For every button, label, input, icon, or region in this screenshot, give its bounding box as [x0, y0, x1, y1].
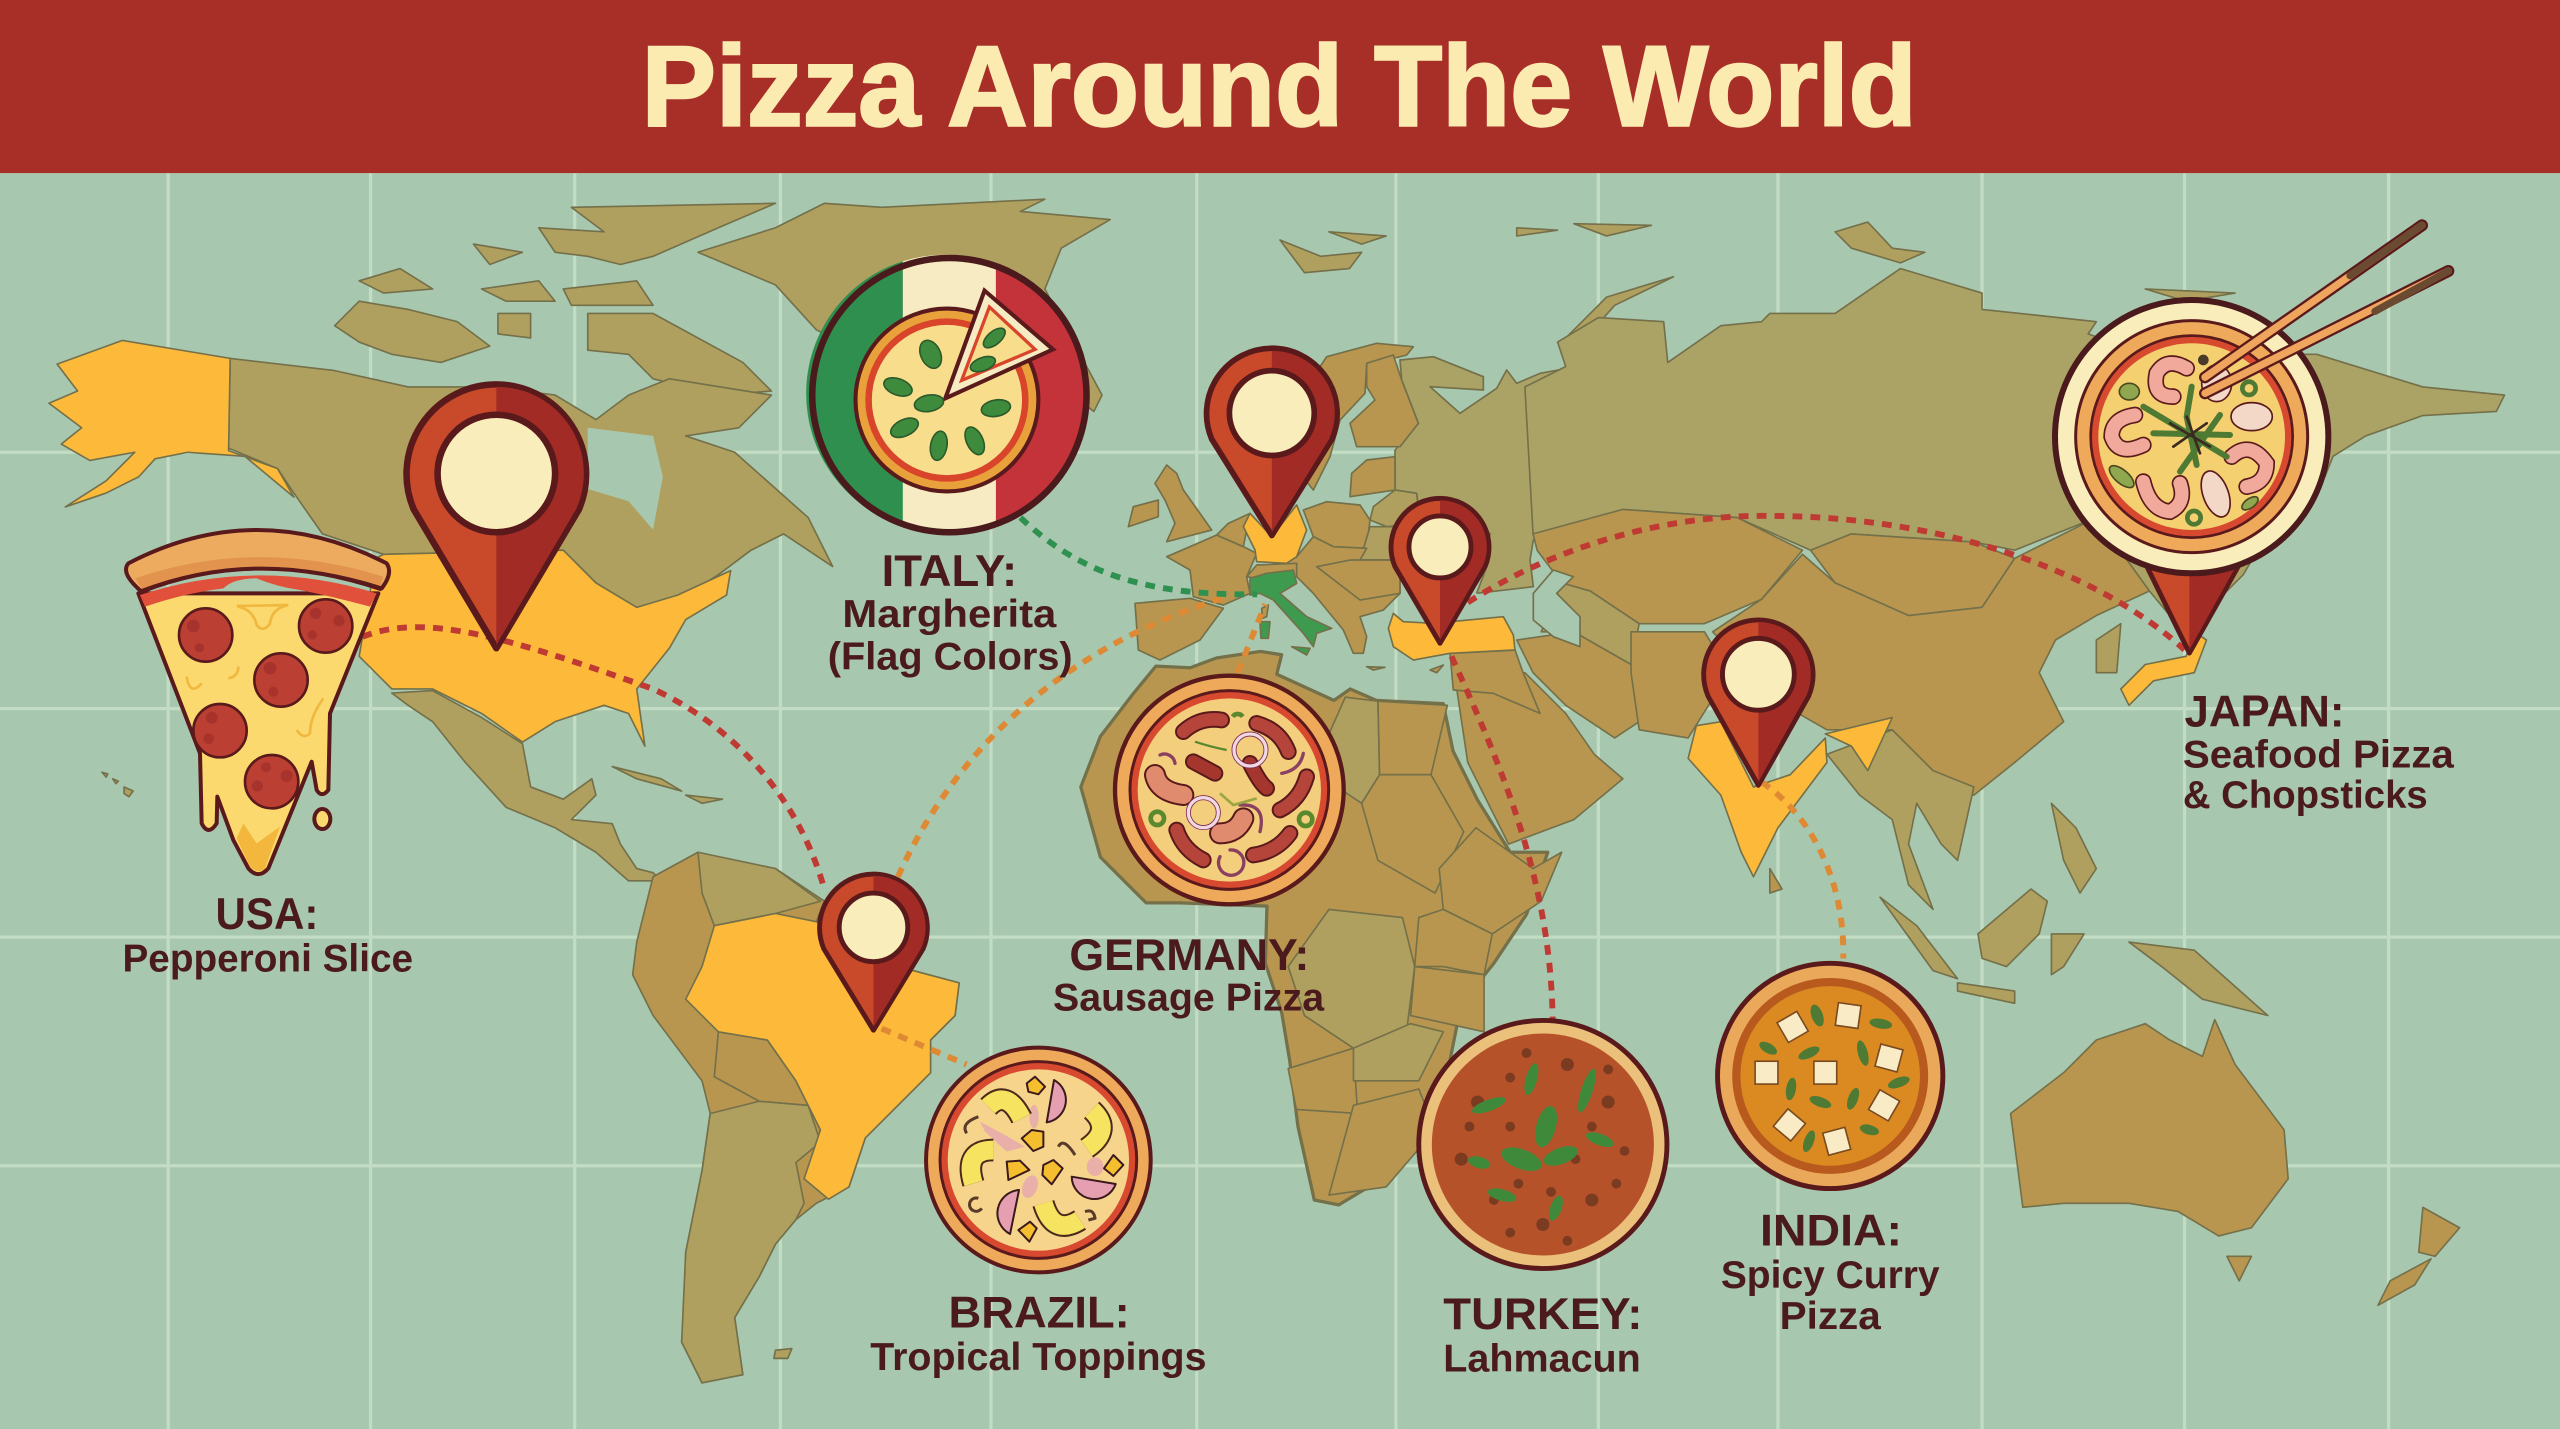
pizza: India spicy curry	[1718, 963, 1943, 1189]
label: India	[1721, 1207, 1940, 1338]
land: Americas	[49, 199, 1110, 1383]
label: Turkey	[1443, 1290, 1642, 1380]
label: USA: USA:	[216, 890, 318, 939]
land: European Russia	[1395, 357, 1667, 593]
land: Europe countries	[1128, 343, 1580, 713]
label: Brazil	[870, 1288, 1207, 1379]
route: Turkey to Lahmacun	[1451, 656, 1553, 1020]
pin: USA	[407, 384, 586, 648]
pin: Turkey	[1391, 498, 1489, 643]
label: Turkey: Lahmacun	[1443, 1337, 1641, 1380]
route: USA to Brazil	[362, 627, 824, 890]
dashed route lines	[362, 516, 2184, 1064]
pizza: USA pepperoni slice	[126, 530, 389, 874]
label: USA	[122, 890, 413, 980]
pizza: Germany sausage	[1115, 676, 1344, 904]
pizza: Japan seafood with chopsticks	[2055, 225, 2448, 573]
label: India: Spicy Curry	[1721, 1254, 1940, 1297]
label: Japan: & Chopsticks	[2183, 774, 2428, 817]
world map	[49, 199, 2504, 1383]
pin: Germany	[1207, 348, 1337, 536]
label: Italy: (Flag Colors)	[828, 635, 1073, 678]
route: India to curry pizza	[1762, 782, 1843, 958]
land: African countries and highlights	[1288, 632, 2207, 1195]
route: Germany pizza to Italy	[1238, 604, 1265, 673]
label: Japan	[2183, 688, 2455, 817]
route: Brazil to Italy	[898, 598, 1224, 877]
label: Italy	[828, 547, 1073, 678]
route: Italy circle to Italy	[1020, 518, 1257, 594]
label: Turkey: TURKEY:	[1443, 1290, 1642, 1339]
label: Germany	[1053, 931, 1325, 1020]
pizza: Italy margherita flag circle	[806, 255, 1088, 534]
label: Japan: JAPAN:	[2184, 688, 2344, 737]
title: Pizza Around The World	[642, 24, 1917, 151]
label: Japan: Seafood Pizza	[2183, 733, 2455, 776]
label: USA: Pepperoni Slice	[122, 937, 413, 980]
label: Brazil: BRAZIL:	[949, 1288, 1130, 1337]
pizza: Turkey lahmacun	[1419, 1020, 1667, 1269]
pin: Japan	[2145, 563, 2240, 653]
title banner	[0, 0, 2560, 173]
label: Italy: Margherita	[842, 593, 1058, 636]
label: Germany: Sausage Pizza	[1053, 977, 1325, 1020]
route: Turkey to Japan	[1468, 516, 2184, 650]
label: India: Pizza	[1780, 1295, 1882, 1338]
label: Germany: GERMANY:	[1069, 931, 1309, 980]
label: India: INDIA:	[1760, 1207, 1902, 1256]
land: Asia and Oceania	[1280, 222, 2504, 1305]
label: Italy: ITALY:	[882, 547, 1017, 596]
route: Brazil pin to Brazil pizza	[882, 1029, 967, 1064]
pizza: Brazil tropical toppings	[926, 1048, 1151, 1272]
pin: India	[1704, 620, 1813, 785]
pin: Brazil	[820, 874, 927, 1030]
label: Brazil: Tropical Toppings	[870, 1336, 1207, 1379]
land: Africa outline	[1081, 651, 1548, 1205]
